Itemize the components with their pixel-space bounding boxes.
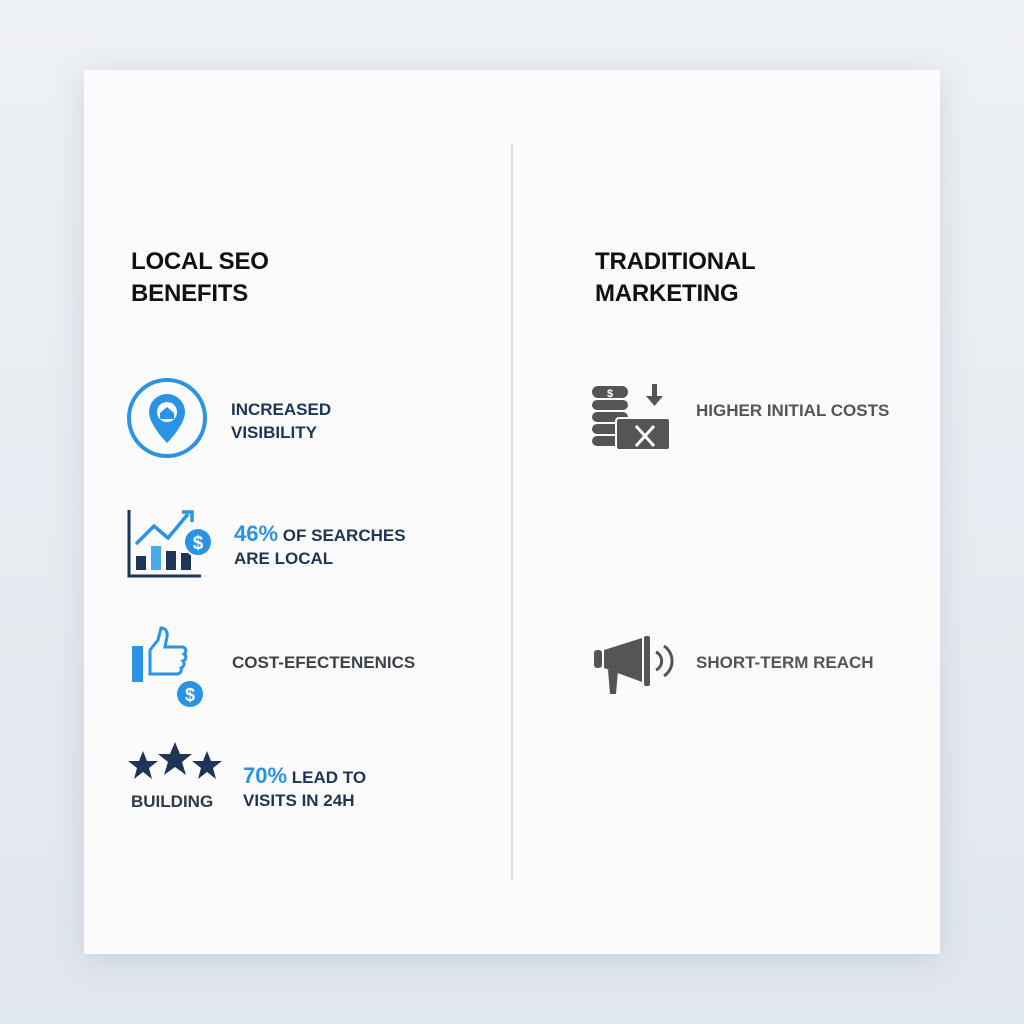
text: 46%: ARE LOCAL: [234, 549, 333, 568]
icon: thumbs up: [132, 626, 203, 707]
text: higher initial costs: HIGHER INITIAL COSTS: [696, 401, 889, 420]
title: local seo: LOCAL SEO: [131, 248, 269, 275]
card panel: [84, 70, 940, 954]
title: traditional marketing: MARKETING: [595, 280, 739, 307]
icon: coins and card: $: [607, 388, 613, 400]
text: 70%: [243, 763, 366, 810]
text: increased visibility: [231, 400, 331, 442]
text: short-term reach: SHORT-TERM REACH: [696, 653, 874, 672]
icon: chart: $: [193, 533, 204, 554]
icon: stars: [128, 742, 222, 779]
title: local seo: BENEFITS: [131, 280, 248, 307]
icon: location pin: [127, 378, 207, 458]
title: local seo: [131, 248, 269, 307]
icon: chart: [128, 510, 211, 578]
title: traditional marketing: [595, 248, 755, 307]
text: 46%: 46% OF SEARCHES: [234, 521, 406, 546]
icon: coins and card: [592, 384, 669, 449]
text: increased visibility: INCREASED: [231, 400, 331, 419]
text: cost: COST-EFECTENENICS: [232, 653, 415, 672]
text: building: BUILDING: [131, 792, 213, 811]
text: 46%: [234, 521, 406, 568]
text: increased visibility: VISIBILITY: [231, 423, 317, 442]
icon: thumbs up: $: [185, 685, 195, 705]
text: 70%: 70% LEAD TO: [243, 763, 366, 788]
title: traditional marketing: TRADITIONAL: [595, 248, 755, 275]
icon: megaphone: [594, 636, 674, 694]
text: 70%: VISITS IN 24H: [243, 791, 354, 810]
